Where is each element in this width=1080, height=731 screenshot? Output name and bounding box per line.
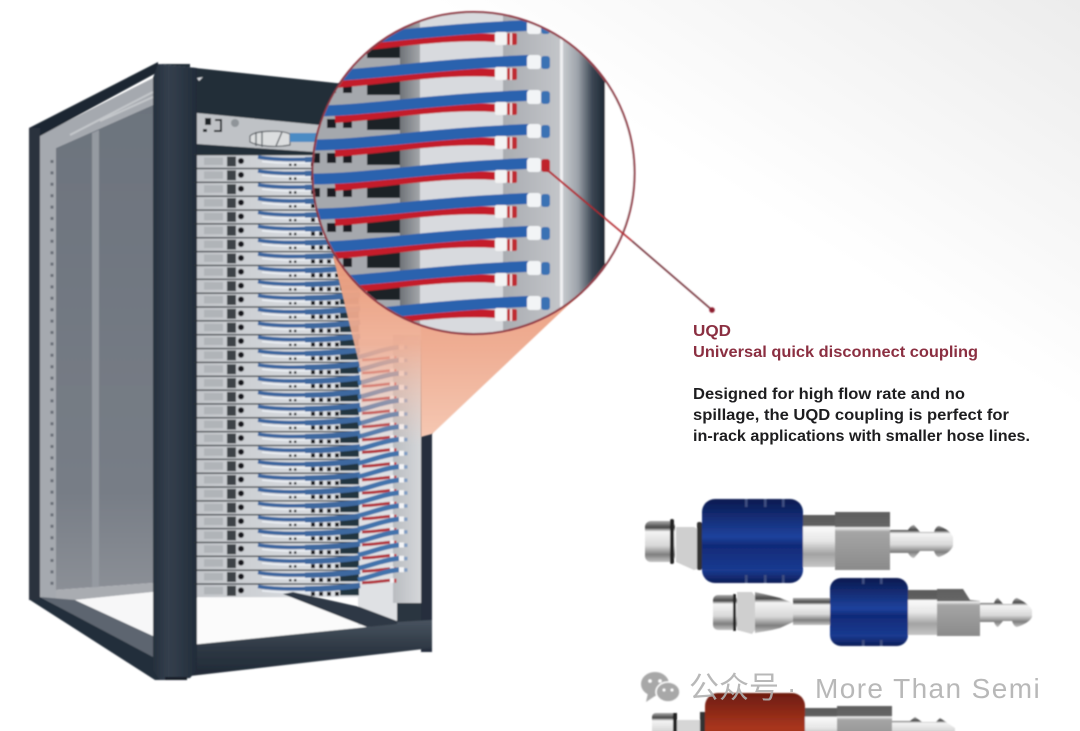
left rear post: [29, 128, 40, 600]
left side lower band: [56, 583, 153, 602]
dark post: [562, 40, 606, 306]
rack top side beam: [29, 62, 158, 136]
rear floor beam: [283, 592, 397, 627]
description text: spillage, the UQD coupling is perfect for: [693, 407, 1009, 424]
square port columns: [313, 83, 352, 267]
coupling 2: blue small: [713, 578, 1032, 646]
light column: [420, 10, 503, 340]
watermark: [641, 672, 1041, 705]
right rail foot: [397, 603, 423, 635]
coupling 3: red: [652, 693, 955, 731]
watermark text: 公众号: [689, 672, 779, 705]
header coupling: [250, 131, 290, 146]
left bottom inner beam: [40, 597, 153, 658]
header blue tube: [290, 133, 318, 142]
magnified hoses: [310, 20, 550, 325]
subheading: Universal quick disconnect coupling: [693, 344, 978, 361]
bottom front beam: [190, 620, 432, 676]
hose barb: [892, 717, 955, 731]
grey column: [400, 10, 420, 340]
left bottom outer beam: [30, 597, 170, 680]
right side hoses: [358, 344, 408, 583]
cone over rack: [333, 256, 421, 445]
circle white base: [312, 12, 634, 334]
blue sleeve: [702, 499, 803, 583]
top screw mark: [197, 77, 203, 81]
watermark name: More Than Semi: [815, 673, 1041, 704]
header panel: [197, 113, 330, 153]
cone right of rack: [421, 256, 582, 437]
hose barb: [980, 598, 1032, 627]
left side floor: [75, 592, 153, 636]
header icons: [205, 118, 211, 125]
watermark separator: ·: [787, 673, 796, 704]
white strip: [560, 39, 563, 307]
description text: Designed for high flow rate and no: [693, 386, 965, 403]
mid grey column: [503, 10, 560, 340]
server rack: [29, 62, 432, 680]
magnifier projection cone: [333, 256, 582, 445]
description text: [693, 386, 1030, 445]
left side perforated rail: [50, 160, 54, 590]
magnified circle: [310, 10, 634, 340]
description text: in-rack applications with smaller hose lines.: [693, 428, 1030, 445]
sleeve notches: [862, 578, 882, 646]
dark block column: [367, 43, 400, 300]
front left post: [153, 64, 197, 680]
blue sleeve: [830, 578, 908, 646]
foot: [165, 677, 187, 680]
server rows: [194, 154, 360, 597]
hose barb: [890, 525, 953, 558]
icon: wechat: [641, 672, 680, 702]
right rear post: [421, 340, 432, 652]
red sleeve: [705, 693, 805, 731]
left equipment zone: [312, 53, 401, 308]
left side rear panel: [56, 105, 153, 590]
floor: [194, 594, 367, 645]
circle outline: [312, 12, 634, 334]
left side vertical strip: [92, 130, 99, 588]
ceiling slats: [70, 92, 153, 135]
heading: UQD: UQD: [693, 323, 731, 340]
header unit: [197, 113, 330, 153]
leader line: [545, 168, 715, 313]
right rail: [393, 335, 421, 603]
top front beam: [158, 64, 345, 156]
left side inner light frame: [40, 78, 153, 600]
coupling 1: blue large: [645, 499, 953, 583]
header coupling details: [256, 131, 282, 147]
right side interior panel: [358, 340, 397, 625]
red highlighted connector tip: [541, 159, 550, 172]
sleeve notches: [745, 499, 784, 583]
